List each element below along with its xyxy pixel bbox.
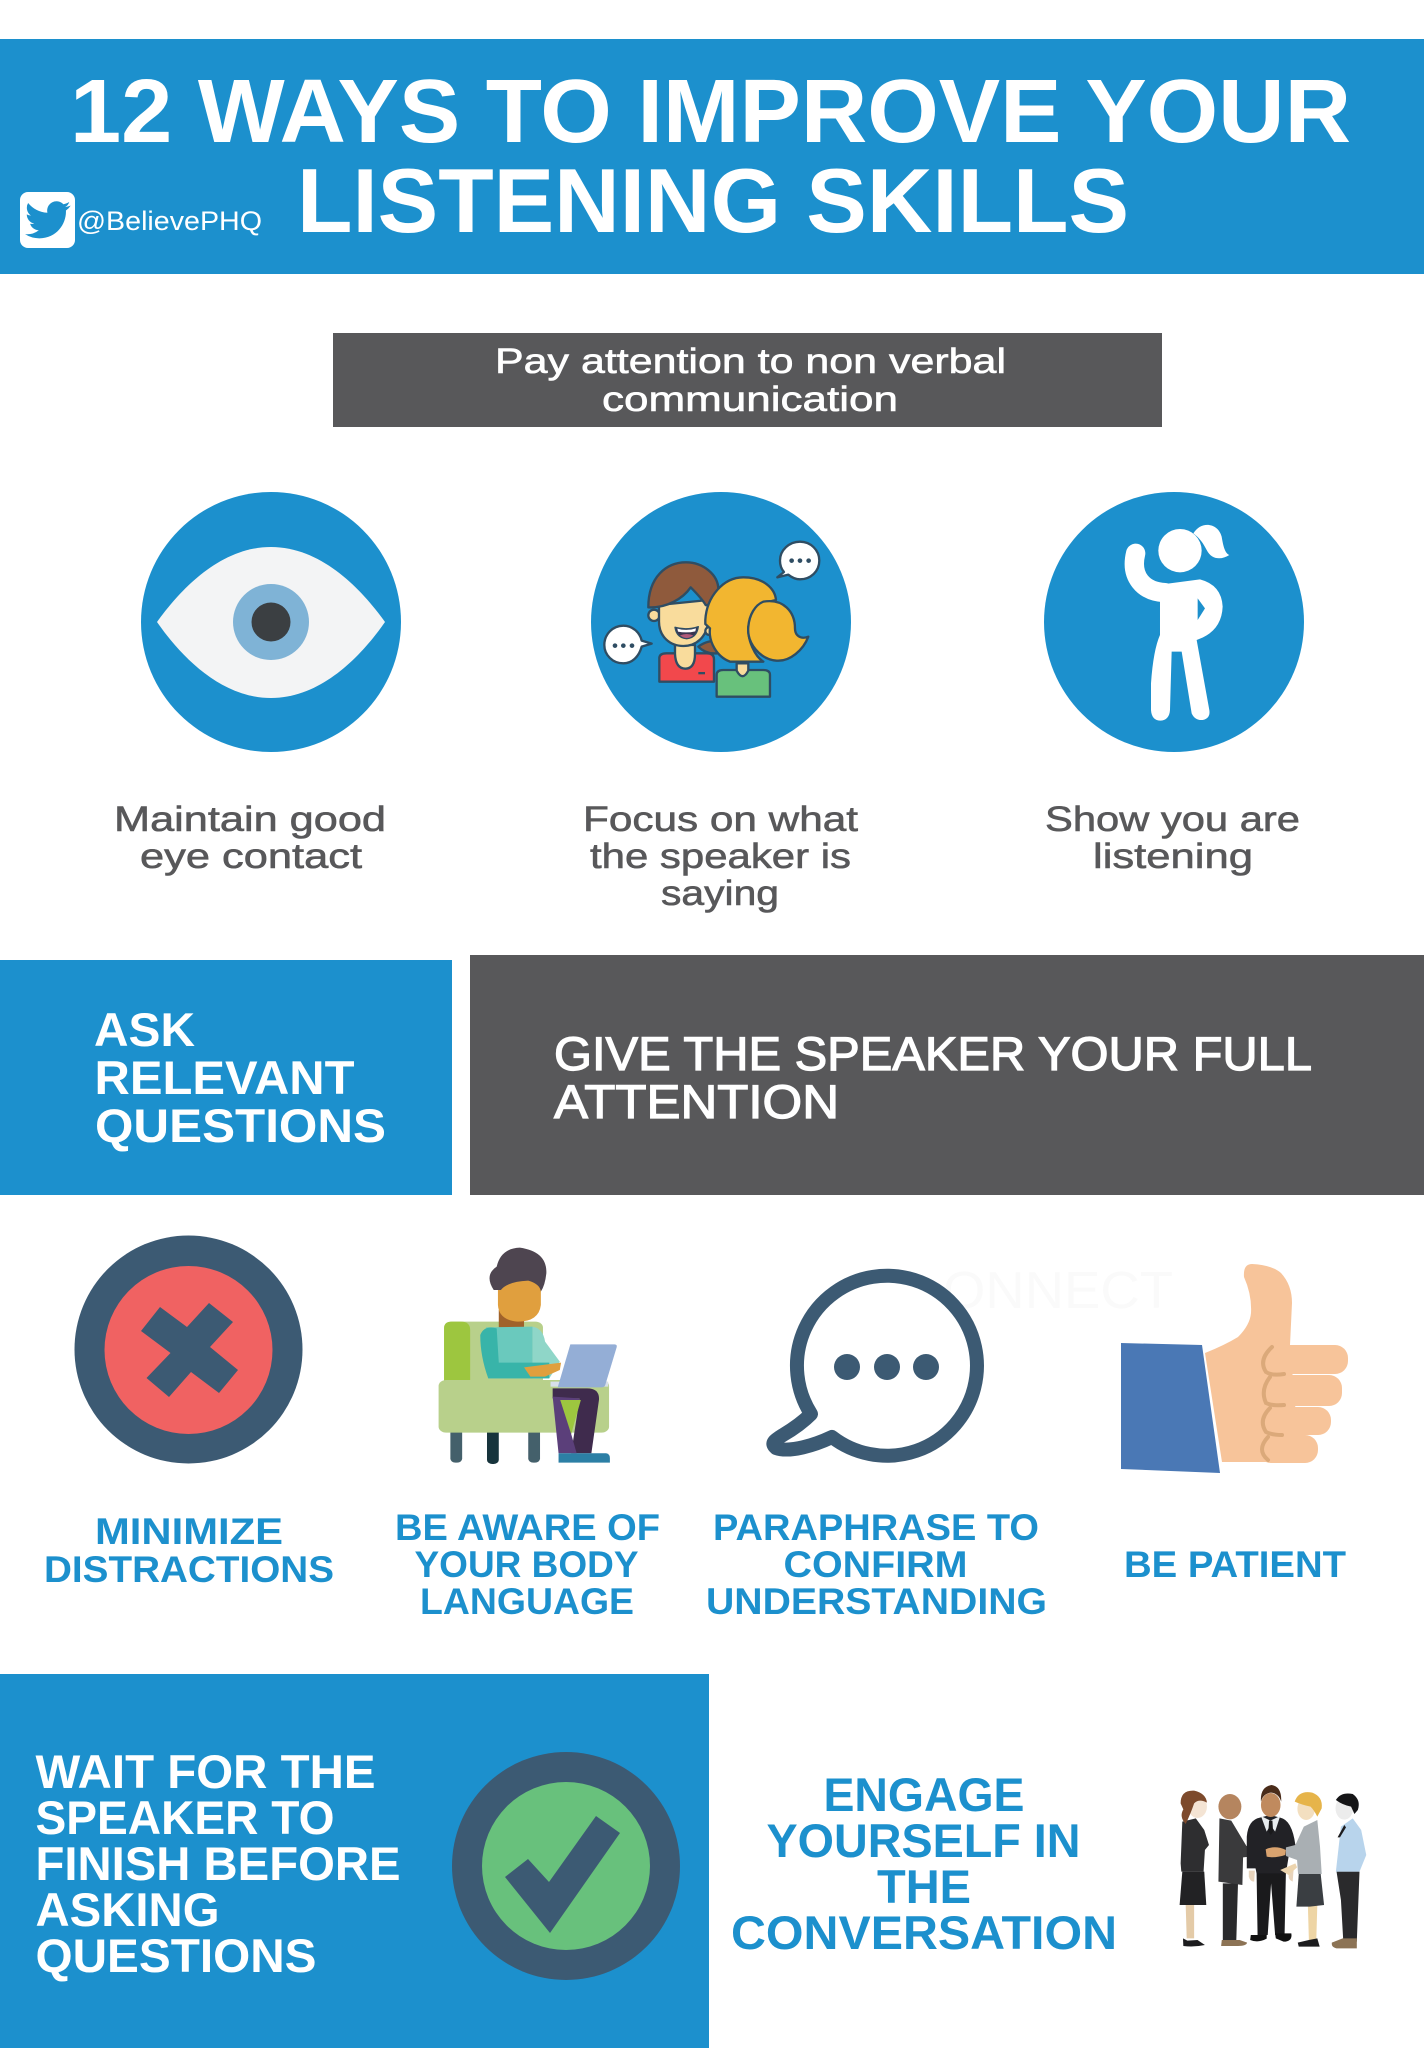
icon: person on armchair with laptop: [439, 1248, 617, 1464]
panel: non verbal communication heading: Pay attention to non verbal: [495, 342, 1006, 381]
panel: ask relevant questions: ASK: [94, 1003, 195, 1056]
label: be aware of your body language: YOUR BODY: [414, 1544, 639, 1585]
text: focus on what the speaker is saying: [583, 800, 858, 913]
text: engage yourself in the conversation: ENGAGE: [824, 1768, 1024, 1821]
panel: ask relevant questions: RELEVANT: [94, 1051, 355, 1104]
panel: non verbal communication heading: communication: [602, 380, 898, 419]
icon: group of business people: [1180, 1785, 1366, 1948]
icon: red cross: [74, 1236, 302, 1464]
text: engage yourself in the conversation: YOURSELF IN: [766, 1814, 1080, 1867]
label: minimize distractions: DISTRACTIONS: [44, 1549, 334, 1590]
label: minimize distractions: [44, 1511, 334, 1590]
text: wait for the speaker to finish: FINISH BEFORE: [36, 1837, 400, 1890]
man bald: [1218, 1794, 1264, 1946]
text: engage yourself in the conversation: CONVERSATION: [731, 1906, 1117, 1959]
text: wait for the speaker to finish: [36, 1745, 400, 1982]
title: LISTENING SKILLS: [297, 151, 1129, 252]
text: show you are listening: listening: [1093, 837, 1253, 876]
text: focus on what the speaker is saying: saying: [661, 874, 779, 913]
text: maintain good eye contact: eye contact: [140, 837, 362, 876]
title: [70, 62, 1351, 252]
icon: green check: [452, 1752, 680, 1980]
panel: give the speaker your full attention: ATTENTION: [554, 1075, 839, 1128]
label: paraphrase to confirm understanding: PARAPHRASE TO: [713, 1507, 1039, 1548]
panel: give the speaker your full attention: GIVE THE SPEAKER YOUR FULL: [554, 1027, 1312, 1080]
icon: standing listener: [1044, 492, 1304, 752]
text: wait for the speaker to finish: WAIT FOR THE: [36, 1745, 375, 1798]
text: focus on what the speaker is saying: Focus on what: [583, 800, 858, 839]
twitter handle: @BelievePHQ: [77, 206, 262, 236]
man right: [1332, 1793, 1366, 1948]
text: wait for the speaker to finish: SPEAKER TO: [36, 1791, 334, 1844]
handshake: [1266, 1847, 1286, 1857]
text: engage yourself in the conversation: [731, 1768, 1117, 1959]
text: show you are listening: Show you are: [1045, 800, 1300, 839]
woman blonde: [1280, 1792, 1324, 1947]
panel: wait for the speaker: [0, 1674, 709, 2048]
header banner: [0, 39, 1424, 274]
label: minimize distractions: MINIMIZE: [95, 1511, 283, 1552]
text: focus on what the speaker is saying: the speaker is: [590, 837, 851, 876]
man centre: [1247, 1785, 1295, 1942]
icon: two people talking: [591, 492, 851, 752]
text: show you are listening: [1045, 800, 1300, 876]
panel: ask relevant questions: QUESTIONS: [95, 1099, 386, 1152]
text: maintain good eye contact: [114, 800, 386, 876]
label: be aware of your body language: LANGUAGE: [420, 1581, 634, 1622]
icon: speech bubble: [773, 1276, 977, 1456]
icon: thumbs up: [1121, 1264, 1348, 1473]
label: be patient: BE PATIENT: [1124, 1544, 1346, 1585]
woman at left: [1180, 1791, 1209, 1946]
text: wait for the speaker to finish: ASKING: [36, 1883, 220, 1936]
label: paraphrase to confirm understanding: CONFIRM: [784, 1544, 968, 1585]
label: be aware of your body language: [395, 1507, 660, 1622]
panel: non verbal communication heading: [333, 333, 1162, 427]
label: paraphrase to confirm understanding: UNDERSTANDING: [706, 1581, 1047, 1622]
label: be aware of your body language: BE AWARE OF: [395, 1507, 660, 1548]
icon: twitter: [20, 192, 75, 248]
faint watermark: ONNECT: [943, 1262, 1173, 1320]
text: maintain good eye contact: Maintain good: [114, 800, 386, 839]
icon: eye: [141, 492, 401, 752]
text: engage yourself in the conversation: THE: [877, 1860, 971, 1913]
label: paraphrase to confirm understanding: [706, 1507, 1047, 1622]
text: wait for the speaker to finish: QUESTIONS: [36, 1929, 316, 1982]
panel: ask relevant questions: [0, 960, 452, 1195]
panel: give the speaker your full attention: [470, 955, 1424, 1195]
title: 12 WAYS TO IMPROVE YOUR: [70, 62, 1351, 162]
